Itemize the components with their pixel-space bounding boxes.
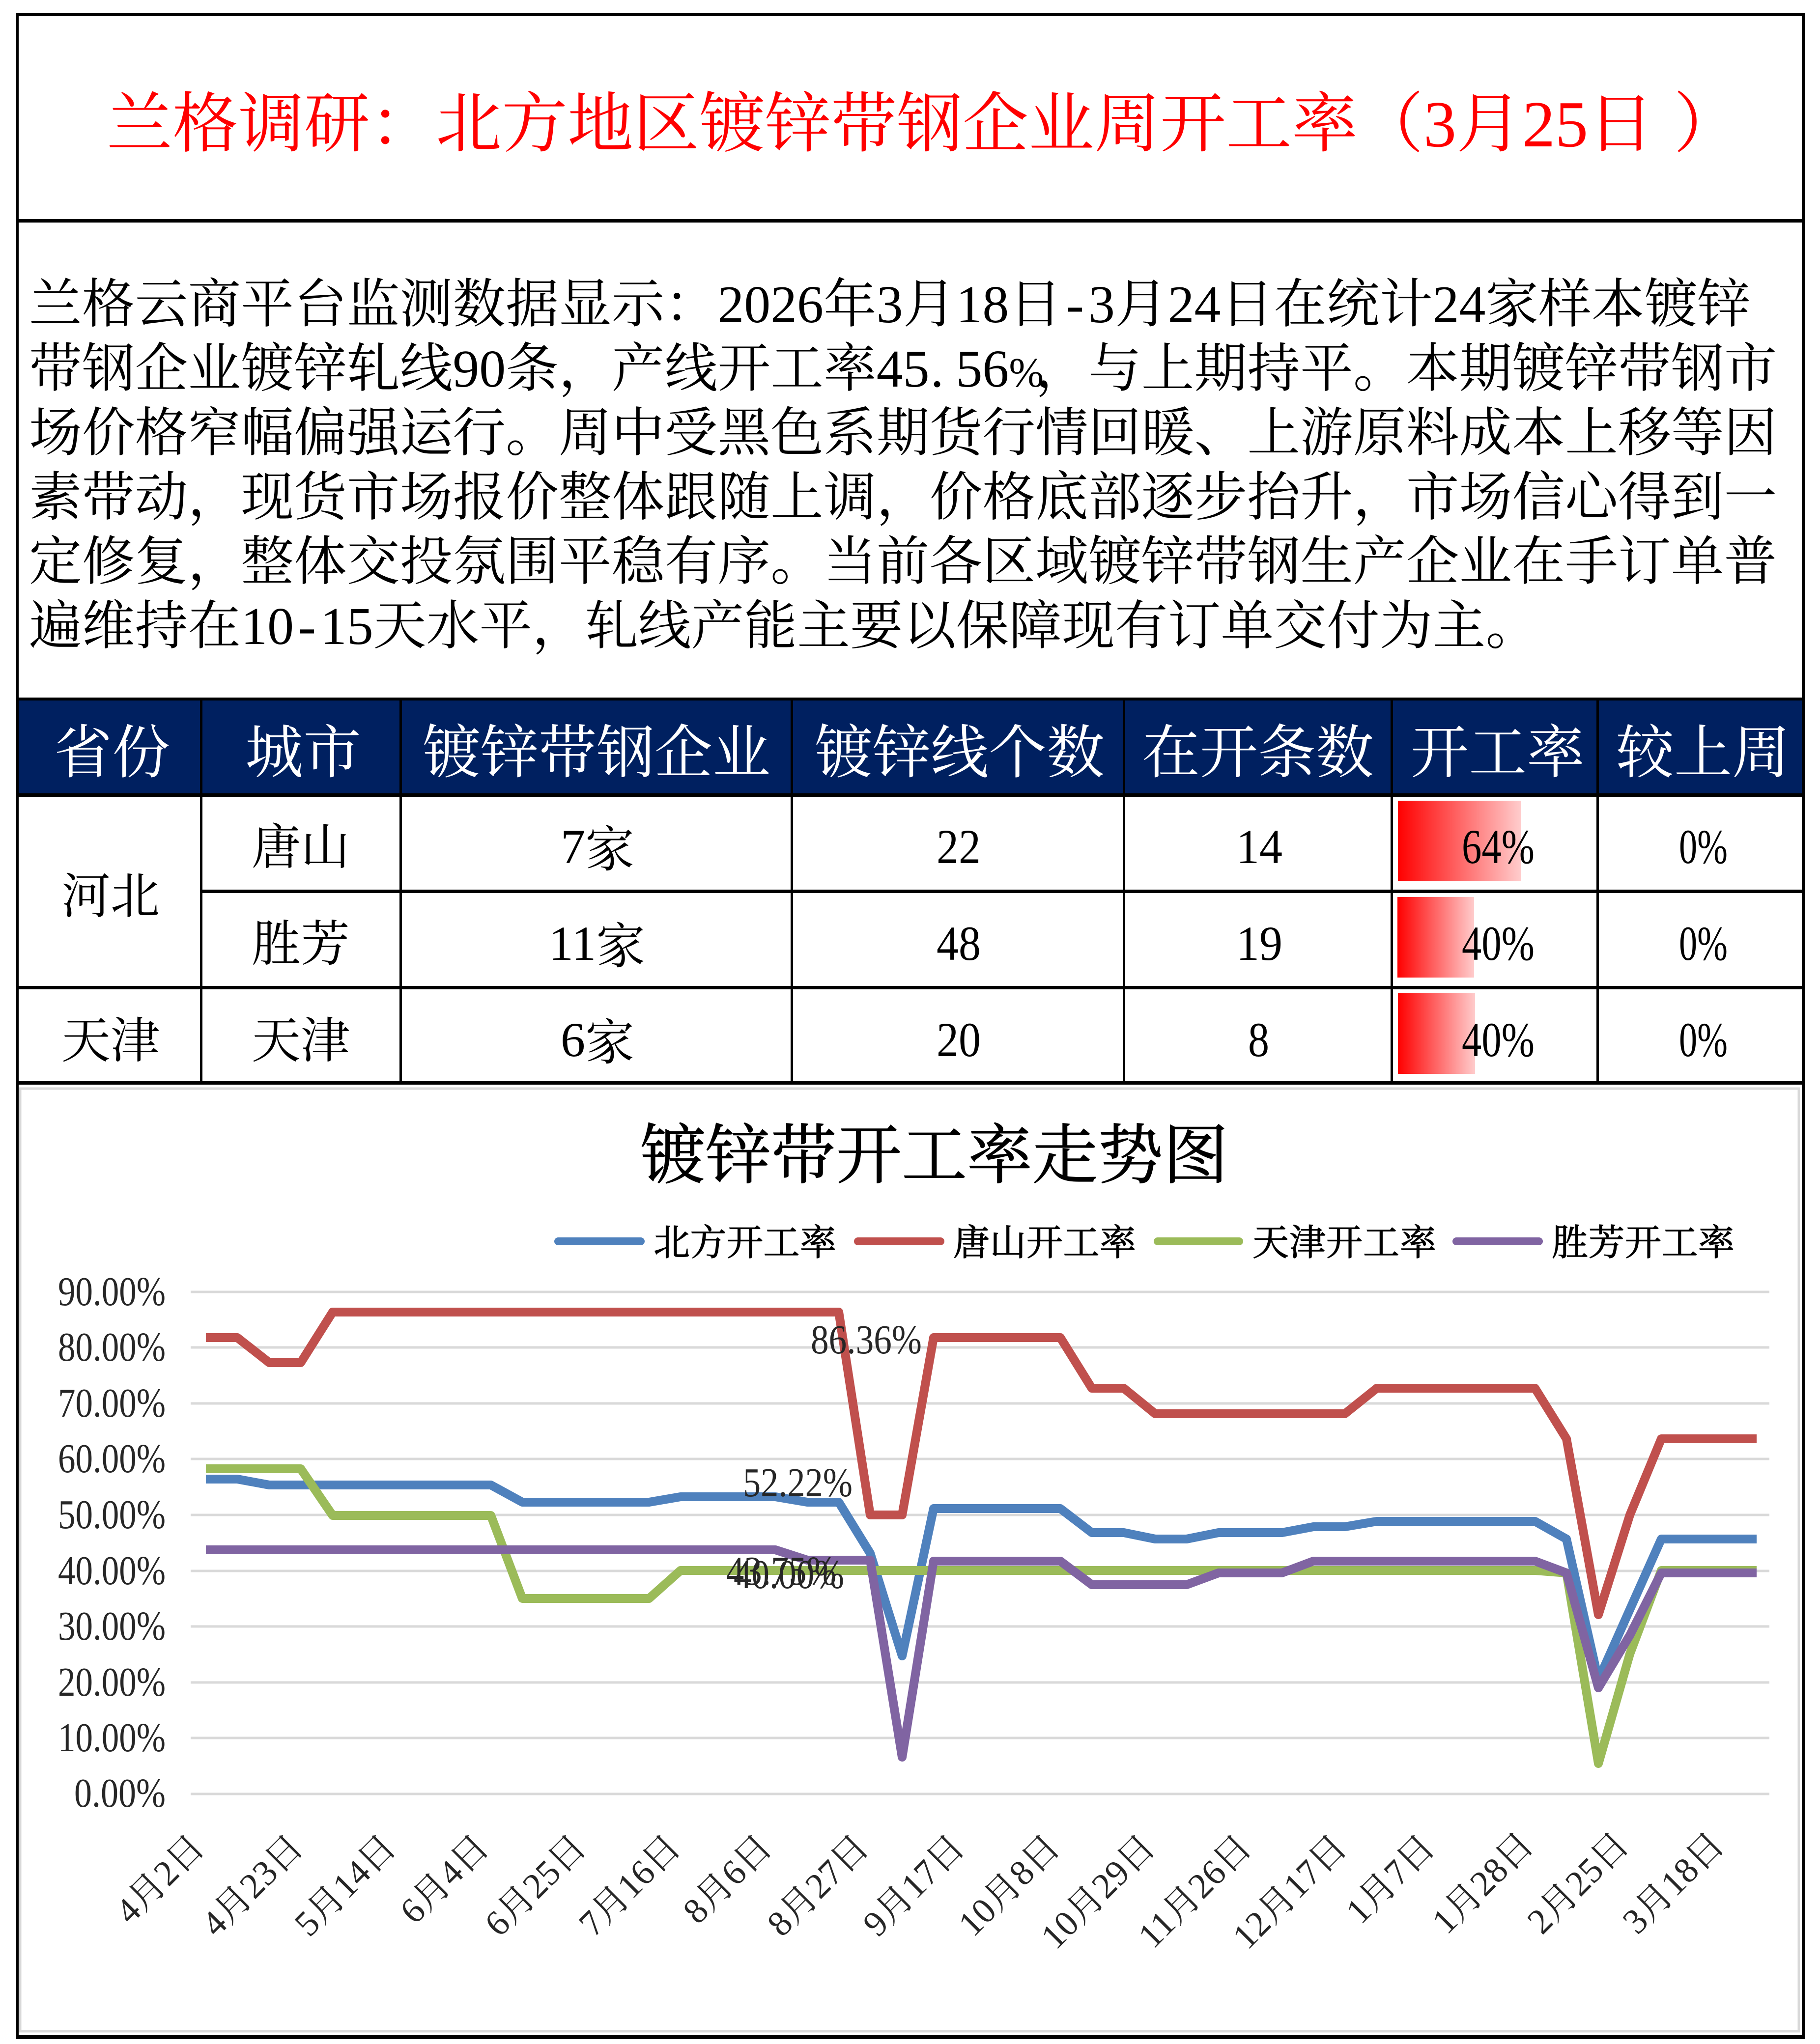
data labels	[726, 1317, 922, 1597]
table header: 开工率	[1411, 721, 1585, 785]
y axis labels: 0.00%	[74, 1770, 166, 1816]
x axis labels: 6月25日	[477, 1827, 594, 1944]
summary line 3: 场价格窄幅偏强运行。周中受黑色系期货行情回暖、上游原料成本上移等因	[29, 404, 1777, 463]
row: 胜芳: 胜芳	[252, 917, 350, 972]
table header: 城市	[245, 721, 361, 785]
x axis labels: 11月26日	[1130, 1827, 1259, 1956]
row: 天津: 0%	[1679, 1012, 1728, 1067]
series: 天津开工率	[206, 1469, 1757, 1764]
y axis labels: 30.00%	[58, 1603, 166, 1649]
legend: 胜芳开工率	[1552, 1223, 1735, 1263]
panel: title box	[16, 13, 1805, 223]
row: 胜芳: 19	[1236, 916, 1282, 971]
row: 天津: 6	[561, 1012, 585, 1067]
row: 胜芳	[252, 897, 1728, 978]
x axis labels: 12月17日	[1225, 1827, 1354, 1957]
x axis labels: 7月16日	[571, 1827, 688, 1944]
panel: summary text	[16, 223, 1805, 698]
x axis labels: 6月4日	[392, 1827, 496, 1931]
table header: 镀锌线个数	[815, 721, 1105, 785]
legend	[558, 1223, 1735, 1263]
row: 胜芳: 11	[549, 916, 596, 971]
legend: 北方开工率	[654, 1223, 836, 1263]
y axis labels: 20.00%	[58, 1659, 166, 1705]
y axis labels: 10.00%	[58, 1715, 166, 1761]
data labels: 40.00%	[734, 1552, 844, 1597]
y axis labels: 60.00%	[58, 1436, 166, 1482]
summary line 1: 兰格云商平台监测数据显示：2026年3月18日-3月24日在统计24家样本镀锌	[29, 276, 1750, 334]
row: 天津: 8	[1248, 1012, 1269, 1067]
row: 唐山: 7	[561, 819, 585, 874]
x axis labels: 10月29日	[1033, 1827, 1163, 1957]
legend: 唐山开工率	[953, 1223, 1136, 1263]
row: 天津	[252, 993, 1728, 1074]
row: 唐山: 64%	[1462, 819, 1535, 874]
y axis labels: 90.00%	[58, 1269, 166, 1315]
x axis labels: 4月23日	[194, 1827, 311, 1944]
data labels: 86.36%	[811, 1317, 922, 1363]
data bar: 40%	[1398, 993, 1475, 1074]
province: 天津: 天津	[61, 1014, 160, 1068]
chart title: 镀锌带开工率走势图	[640, 1120, 1228, 1192]
row: 唐山: 唐山	[252, 820, 350, 875]
row: 胜芳: 0%	[1679, 916, 1728, 971]
summary line 2: 带钢企业镀锌轧线90条，产线开工率45.56%，与上期持平。本期镀锌带钢市	[29, 340, 1777, 398]
y axis labels: 50.00%	[58, 1492, 166, 1538]
table header: 镀锌带钢企业	[423, 721, 770, 785]
summary line 4: 素带动，现货市场报价整体跟随上调，价格底部逐步抬升，市场信心得到一	[29, 469, 1777, 527]
row: 天津: 天津	[252, 1014, 350, 1068]
x axis labels: 2月25日	[1519, 1824, 1636, 1941]
series: 北方开工率	[206, 1479, 1757, 1680]
y axis labels	[58, 1269, 166, 1816]
x axis labels	[108, 1824, 1732, 1957]
x axis labels: 9月17日	[855, 1827, 972, 1944]
summary line 6: 遍维持在10-15天水平，轧线产能主要以保障现有订单交付为主。	[29, 597, 1538, 656]
title: 兰格调研：北方地区镀锌带钢企业周开工率（3月25日 ）	[107, 88, 1739, 161]
x axis labels: 3月18日	[1615, 1824, 1732, 1941]
x axis labels: 10月8日	[950, 1827, 1067, 1944]
province: 河北: 河北	[61, 869, 160, 924]
data labels: 43.75%	[726, 1548, 836, 1594]
legend: 天津开工率	[1252, 1223, 1436, 1263]
row: 唐山	[252, 801, 1728, 881]
x axis labels: 1月28日	[1424, 1824, 1541, 1941]
x axis labels: 5月14日	[286, 1827, 403, 1944]
panel: line chart	[16, 1083, 1805, 2039]
table header: 省份	[54, 721, 170, 785]
y axis labels: 40.00%	[58, 1548, 166, 1594]
row: 唐山: 14	[1236, 819, 1282, 874]
summary line 5: 定修复，整体交投氛围平稳有序。当前各区域镀锌带钢生产企业在手订单普	[29, 533, 1777, 591]
row: 天津: 40%	[1462, 1012, 1535, 1067]
series: 胜芳开工率	[206, 1550, 1757, 1757]
series: 唐山开工率	[206, 1312, 1757, 1615]
data labels: 52.22%	[743, 1460, 853, 1506]
y axis labels: 70.00%	[58, 1380, 166, 1426]
row: 唐山: 0%	[1679, 819, 1728, 874]
table header	[18, 698, 1803, 797]
x axis labels: 1月7日	[1338, 1827, 1442, 1931]
row: 胜芳: 48	[937, 916, 981, 971]
x axis labels: 8月6日	[675, 1827, 779, 1931]
x axis labels: 8月27日	[759, 1827, 876, 1944]
row: 唐山: 22	[937, 819, 981, 874]
table header: 较上周	[1616, 721, 1790, 785]
row: 唐山: 家	[585, 823, 634, 877]
row: 天津: 家	[585, 1016, 634, 1070]
row: 天津: 20	[937, 1012, 981, 1067]
x axis labels: 4月2日	[108, 1827, 212, 1931]
table header: 在开条数	[1142, 721, 1374, 785]
data bar: 64%	[1398, 801, 1521, 881]
row: 胜芳: 家	[596, 920, 645, 974]
panel: data table	[16, 698, 1805, 1085]
row: 胜芳: 40%	[1462, 916, 1535, 971]
y axis labels: 80.00%	[58, 1324, 166, 1370]
data bar: 40%	[1397, 897, 1474, 978]
